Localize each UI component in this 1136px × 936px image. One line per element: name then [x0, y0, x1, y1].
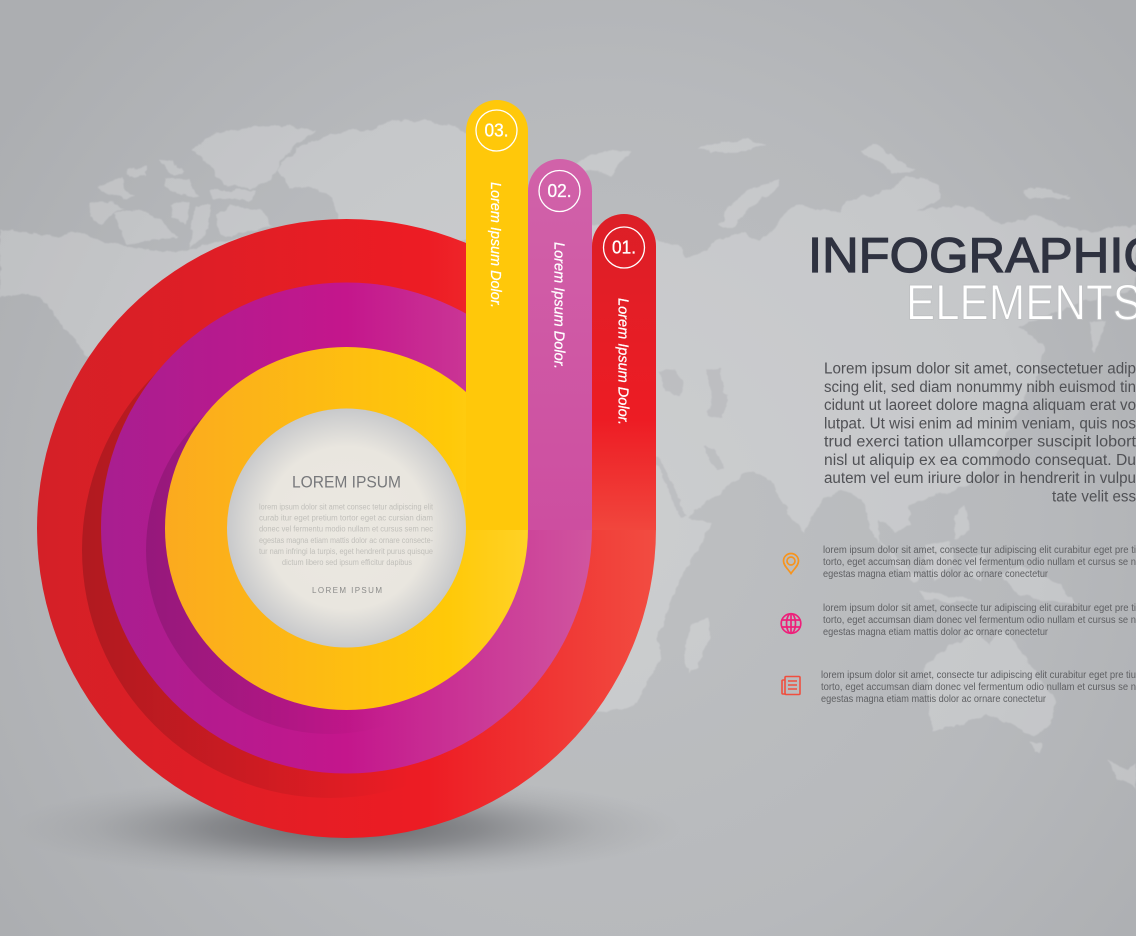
map: north america [0, 230, 350, 380]
item 1 text: lorem ipsum dolor sit amet, consecte tur adipiscing elit curabitur eget pre ti [823, 545, 1136, 556]
item 3 text: egestas magna etiam mattis dolor ac ornare conectetur [821, 694, 1047, 705]
ring 01: red [37, 214, 656, 838]
tab 02 label: Lorem Ipsum Dolor. [550, 242, 568, 369]
tab 03 label [476, 110, 517, 308]
intro paragraph: lutpat. Ut wisi enim ad minim veniam, quis nos [824, 416, 1136, 432]
intro paragraph: tate velit ess [1052, 488, 1136, 506]
icon: map pin [784, 554, 798, 574]
intro paragraph: scing elit, sed diam nonummy nibh euismod tin [824, 379, 1136, 396]
tab 03 label: 03. [484, 120, 508, 140]
center circle: lorem ipsum dolor sit amet consec tetur adipiscing elit [259, 502, 434, 512]
tab 02 label [539, 170, 580, 369]
map: indonesia [880, 505, 1075, 605]
center circle: donec vel fermentu modio nullam et cursus sem nec [259, 524, 433, 534]
map: inland seas [653, 368, 729, 517]
intro paragraph: Lorem ipsum dolor sit amet, consectetuer adip [824, 360, 1136, 378]
intro paragraph: cidunt ut laoreet dolore magna aliquam erat vo [824, 397, 1136, 414]
item 2 text: lorem ipsum dolor sit amet, consecte tur adipiscing elit curabitur eget pre ti [823, 603, 1136, 614]
center circle: curab itur eget pretium tortor eget ac cursian diam [259, 514, 433, 522]
center circle: dictum libero sed ipsum efficitur dapibus [282, 558, 412, 567]
ring 03: yellow [165, 100, 528, 710]
map: australia [925, 625, 1056, 754]
map: greenland [277, 120, 470, 240]
tab 01 label [604, 227, 644, 425]
center circle: LOREM IPSUM [292, 472, 401, 492]
center circle: egestas magna etiam mattis dolor ac ornare consecte- [259, 536, 433, 545]
item 2 text [823, 603, 1136, 638]
intro paragraph: autem vel eum iriure dolor in hendrerit in vulpu [824, 470, 1136, 487]
tab 01 label: 01. [612, 238, 636, 258]
tab 02 label: 02. [548, 181, 572, 201]
item 2 text: egestas magna etiam mattis dolor ac ornare conectetur [823, 627, 1049, 638]
map: svalbard [573, 150, 632, 177]
icon: globe [781, 614, 801, 633]
map: arctic russia islands [697, 140, 1070, 226]
icon: newspaper [782, 676, 800, 694]
item 1 text: egestas magna etiam mattis dolor ac ornare conectetur [823, 569, 1049, 580]
map: madagascar [684, 616, 710, 672]
item 2 [781, 603, 1136, 638]
world map [0, 120, 1136, 788]
intro paragraph: trud exerci tation ullamcorper suscipit lobort [824, 434, 1136, 450]
center circle [227, 408, 466, 648]
center circle: LOREM IPSUM [312, 586, 382, 595]
ground shadow [11, 776, 681, 880]
intro paragraph [824, 360, 1136, 506]
item 3 text [821, 670, 1136, 705]
title [808, 229, 1136, 330]
concentric chart [37, 100, 656, 838]
map: arctic islands [88, 125, 317, 248]
item 1 [784, 545, 1136, 580]
intro paragraph: nisl ut aliquip ex ea commodo consequat. Du [824, 452, 1136, 469]
tab 01 label: Lorem Ipsum Dolor. [614, 298, 632, 425]
tab 03 label: Lorem Ipsum Dolor. [487, 182, 504, 308]
item 3 [782, 670, 1136, 705]
item 1 text [823, 545, 1136, 580]
map: eurasia and africa [540, 176, 1136, 720]
map: sakhalin [1090, 320, 1106, 354]
map: new zealand [1108, 760, 1136, 788]
ring 02: magenta [101, 159, 592, 774]
center circle: tur nam infringi la turpis, eget hendrerit purus quisque [259, 547, 434, 556]
